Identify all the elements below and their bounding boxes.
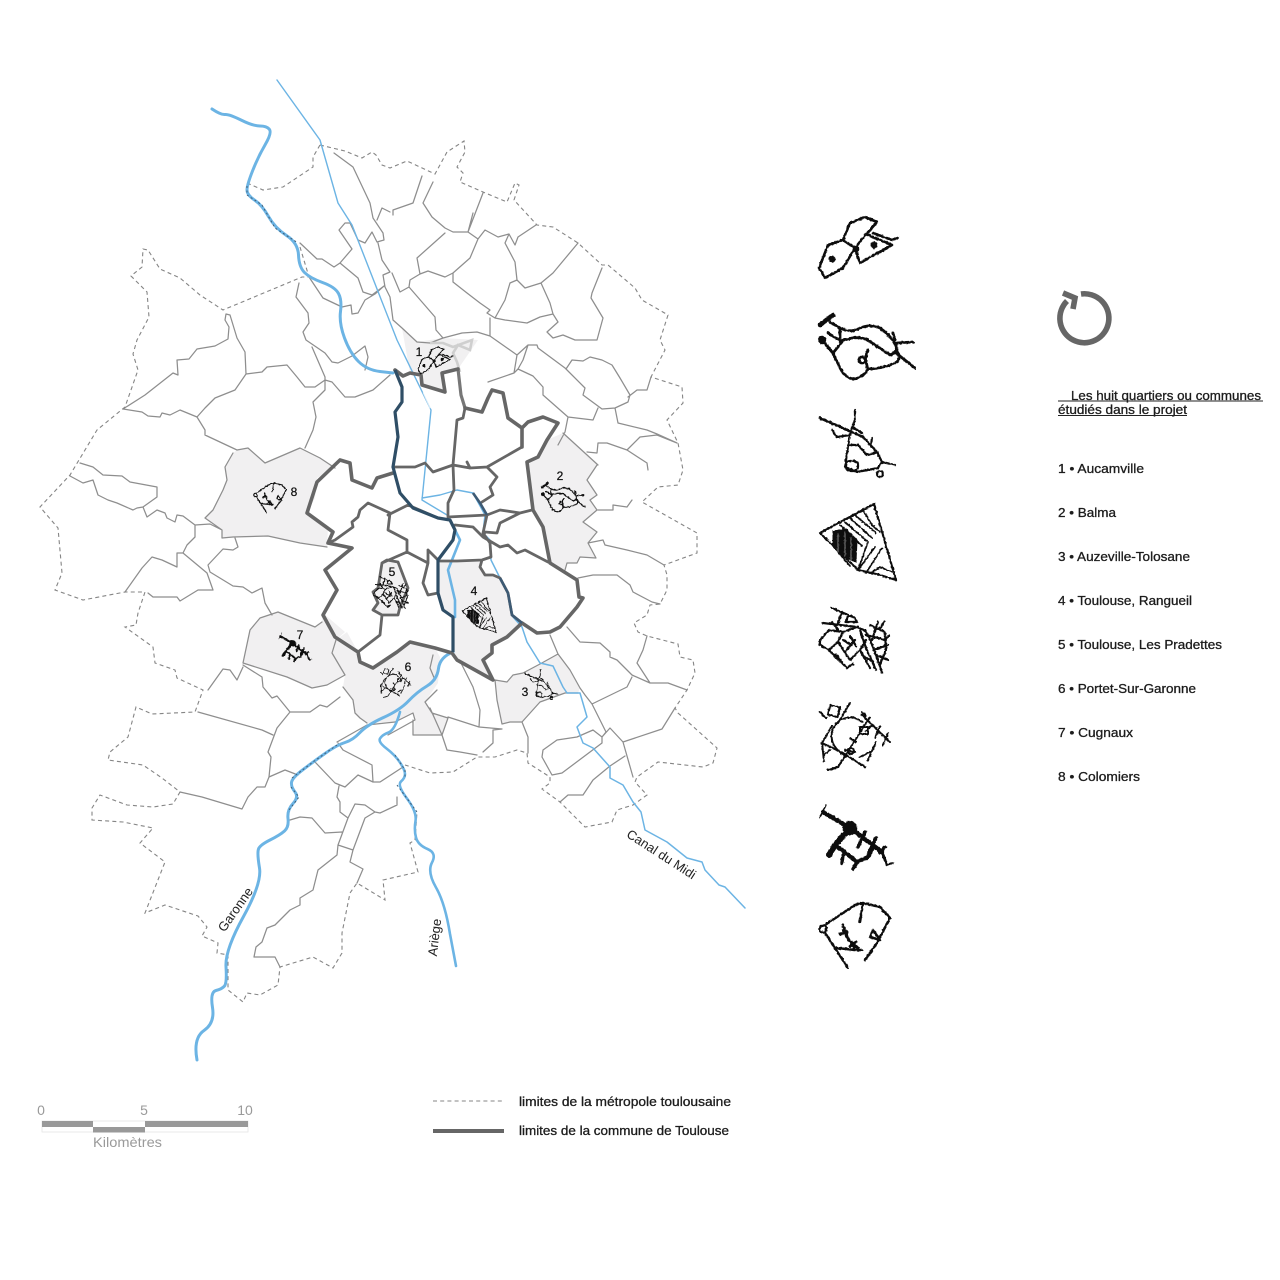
list of neighbourhoods: 2 • Balma [1058, 506, 1116, 520]
Toulouse inner sectors [328, 408, 548, 652]
stamp 8 [254, 483, 286, 513]
river: Garonne north [212, 109, 393, 373]
scale bar: Kilomètres [93, 1134, 162, 1150]
list of neighbourhoods: 4 • Toulouse, Rangueil [1058, 594, 1192, 608]
stamp 1 [418, 347, 453, 374]
metropole outer boundary [40, 141, 717, 1002]
map numbers: 5 [389, 565, 396, 579]
heading: study list [1058, 389, 1263, 417]
boundary speckle over rivers [247, 186, 417, 812]
stamp 4 [462, 598, 496, 632]
river: Garonne channel [448, 530, 460, 617]
schema 4 Rangueil [820, 504, 896, 580]
map numbers: 7 [297, 628, 304, 642]
canal fade patch [424, 392, 431, 408]
stamp 7 [279, 633, 312, 662]
label: Canal du Midi: Canal du Midi [624, 826, 699, 882]
river: Garonne south [196, 652, 453, 1060]
scale bar [37, 1102, 253, 1150]
schema 7 Cugnaux [820, 805, 893, 869]
schema 2 Balma [819, 315, 915, 379]
canal du Midi [457, 490, 745, 908]
map numbers: 8 [291, 485, 298, 499]
schema 5 Les Pradettes [820, 608, 889, 672]
schema 8 Colomiers [820, 903, 890, 968]
Garonne through Toulouse [393, 370, 455, 652]
map numbers: 6 [405, 660, 412, 674]
schema 1 Aucamville [819, 217, 898, 278]
label: Garonne: Garonne [215, 884, 256, 934]
legend: metropole limit: limites de la métropole toulousaine [519, 1095, 731, 1109]
schema 6 Portet [820, 703, 890, 770]
stamp 5 [374, 577, 408, 609]
scale bar: 10 [237, 1102, 253, 1118]
list of neighbourhoods [1058, 462, 1222, 784]
stamp 2 [542, 483, 585, 512]
stamp 3 [525, 670, 558, 699]
legend: Toulouse limit: limites de la commune de Toulouse [519, 1124, 729, 1138]
schema 3 Auzeville [820, 410, 895, 477]
legend [433, 1095, 731, 1138]
river: Ariege [380, 712, 456, 966]
label: Ariege: Ariège [425, 918, 444, 957]
commune boundaries [70, 153, 687, 967]
list of neighbourhoods: 8 • Colomiers [1058, 770, 1140, 784]
list of neighbourhoods: 6 • Portet-Sur-Garonne [1058, 682, 1196, 696]
canal north [277, 80, 457, 515]
scale bar: 5 [140, 1102, 148, 1118]
list of neighbourhoods: 1 • Aucamville [1058, 462, 1144, 476]
rivers [196, 80, 745, 1060]
map numbers: 4 [471, 584, 478, 598]
commune de Toulouse boundary [307, 369, 583, 680]
icon: rotate arrow [1060, 293, 1109, 343]
study stamps on map [254, 347, 585, 699]
studied area fills [205, 328, 598, 735]
list of neighbourhoods: 3 • Auzeville-Tolosane [1058, 550, 1190, 564]
map numbers: 2 [557, 469, 564, 483]
Canal overlaid on Toulouse boundary [473, 493, 522, 623]
list of neighbourhoods: 7 • Cugnaux [1058, 726, 1134, 740]
scale bar: 0 [37, 1102, 45, 1118]
panel: enlarged neighbourhood schemas [819, 217, 915, 968]
map [40, 80, 745, 1060]
Aucamville faded boundary [430, 340, 472, 408]
heading: study list: Les huit quartiers ou communes [1071, 389, 1261, 403]
map numbers [291, 345, 564, 699]
map numbers: 1 [416, 345, 423, 359]
map numbers: 3 [522, 685, 529, 699]
stamp 6 [380, 668, 411, 697]
list of neighbourhoods: 5 • Toulouse, Les Pradettes [1058, 638, 1222, 652]
heading: study list: étudiés dans le projet [1058, 403, 1188, 417]
